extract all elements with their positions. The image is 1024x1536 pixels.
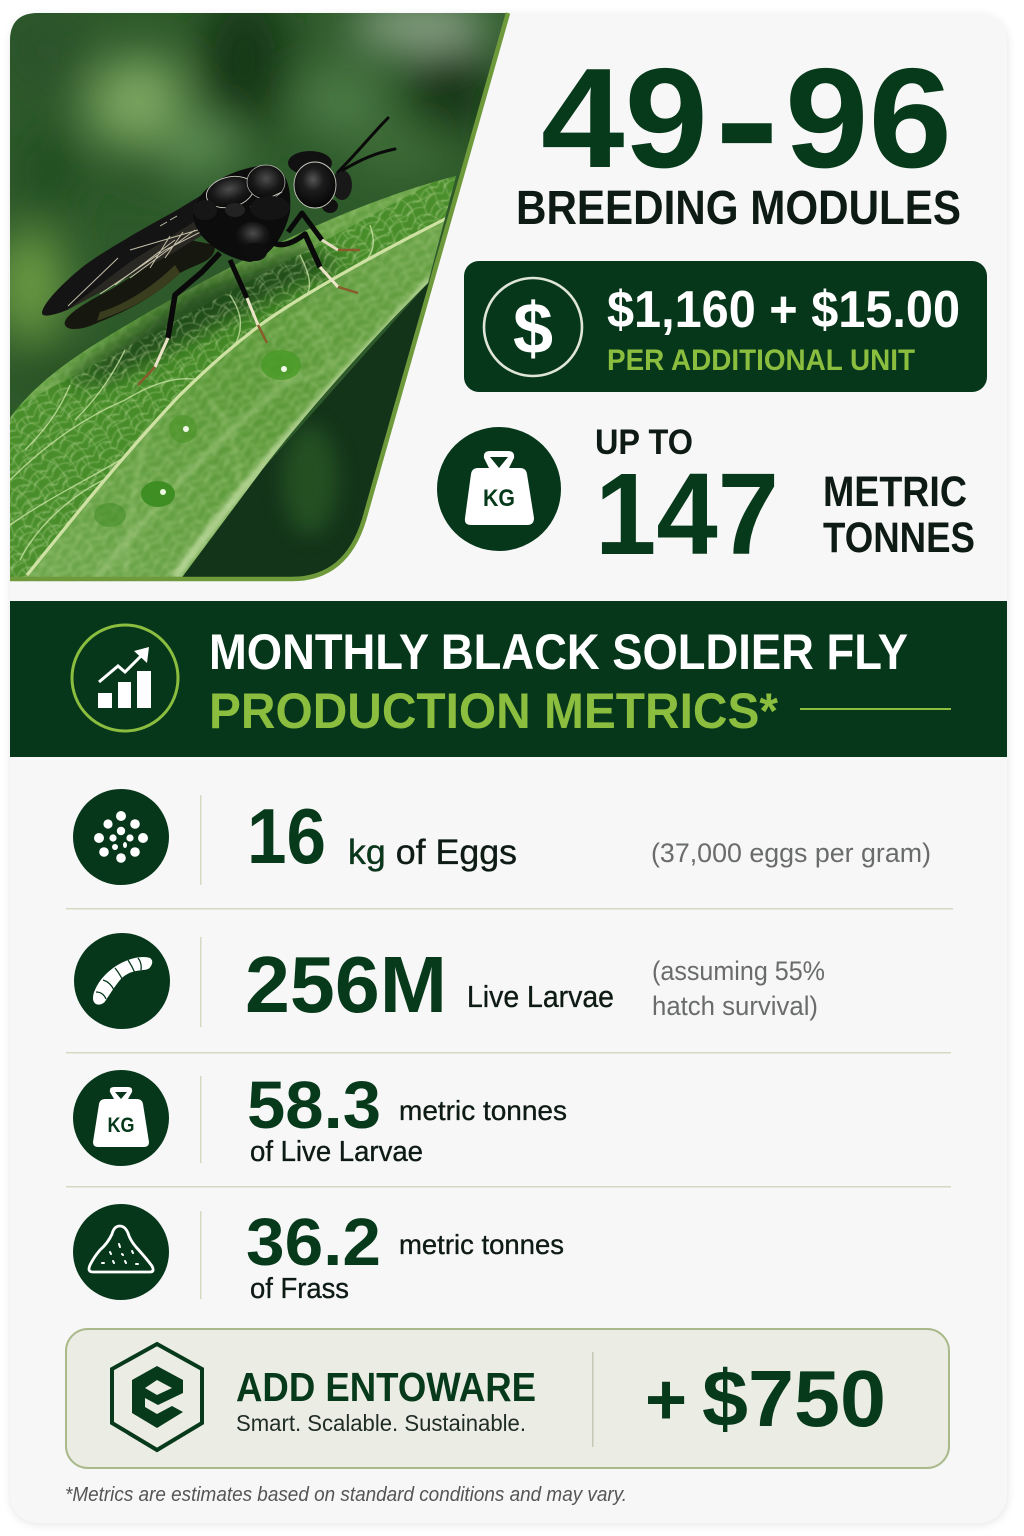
metric row: larvae count <box>74 933 825 1029</box>
product name: ADD ENTOWARE <box>236 1364 536 1410</box>
thorax <box>193 165 290 262</box>
abdomen <box>65 240 215 329</box>
fly <box>42 118 395 385</box>
icon: kg weight: KG <box>483 485 515 512</box>
note: (assuming 55% <box>652 956 825 986</box>
icon: dollar coin: $ <box>513 289 553 369</box>
label: kg of Eggs <box>348 833 517 872</box>
leaf <box>10 176 456 577</box>
fine veins left of midrib <box>10 178 456 577</box>
unit: metric tonnes <box>399 1095 567 1126</box>
metric tonnes label: TONNES <box>823 514 975 562</box>
heading: 49-96 breeding modules: BREEDING MODULES <box>516 182 961 235</box>
icon: kg weight <box>437 427 561 551</box>
value: 58.3 <box>247 1068 381 1143</box>
footnote: *Metrics are estimates based on standard conditions and may vary. <box>65 1484 627 1506</box>
midrib <box>27 218 447 575</box>
note: hatch survival) <box>652 991 818 1021</box>
icon: Entoware hexagon logo <box>112 1344 202 1450</box>
value: 16 <box>247 792 326 880</box>
tagline: Smart. Scalable. Sustainable. <box>236 1410 526 1436</box>
photo background bokeh <box>0 0 510 583</box>
metric tonnes label: METRIC <box>823 468 967 516</box>
label: of Live Larvae <box>250 1136 423 1168</box>
up to label: UP TO <box>595 423 693 462</box>
shields <box>206 176 252 208</box>
dark leaf tone left of midrib <box>10 170 456 580</box>
label: of Frass <box>250 1273 349 1305</box>
panel: price <box>464 261 987 392</box>
banner title: PRODUCTION METRICS* <box>209 683 779 739</box>
note: (37,000 eggs per gram) <box>651 838 931 868</box>
banner title <box>209 624 908 739</box>
value: 36.2 <box>246 1205 381 1280</box>
icon: dollar coin <box>484 278 582 376</box>
note <box>652 956 825 1021</box>
label: Live Larvae <box>467 979 614 1014</box>
add-on price: + <box>645 1360 687 1440</box>
icon: growth chart <box>72 625 178 731</box>
panel: photo of black soldier fly on leaf <box>0 0 510 590</box>
metric row: larvae weight <box>73 1068 567 1168</box>
icon: kg weight: KG <box>108 1114 134 1137</box>
icon: frass pile <box>73 1204 169 1300</box>
heading: 49-96 breeding modules: - <box>717 42 777 201</box>
banner title: MONTHLY BLACK SOLDIER FLY <box>209 624 908 680</box>
price text: $1,160 + $15.00 <box>607 281 960 339</box>
icon: kg weight <box>73 1070 169 1166</box>
heading: 49-96 breeding modules: 96 <box>785 39 952 198</box>
metric tonnes label <box>823 468 975 562</box>
price unit: PER ADDITIONAL UNIT <box>607 344 915 377</box>
metric row: eggs <box>73 789 931 885</box>
water droplets <box>94 350 301 527</box>
unit: metric tonnes <box>399 1229 564 1260</box>
blurred streaks right of midrib <box>95 280 432 580</box>
heading: 49-96 breeding modules: 49 <box>541 39 708 198</box>
near legs <box>272 234 320 267</box>
head <box>288 151 332 172</box>
far leg <box>288 213 322 240</box>
147 value: 147 <box>595 449 779 579</box>
heading: 49-96 breeding modules <box>516 39 961 235</box>
icon: eggs <box>73 789 169 885</box>
add-on price: $750 <box>702 1354 886 1443</box>
antennae <box>338 118 395 172</box>
panel: capacity <box>437 423 975 579</box>
soft texture on out-of-focus half <box>12 180 444 577</box>
metric row: frass <box>73 1204 564 1305</box>
icon: larva <box>74 933 170 1029</box>
shadow under fly <box>60 250 345 385</box>
wing <box>42 196 202 316</box>
panel: add Entoware <box>66 1329 949 1468</box>
section banner <box>10 601 1007 757</box>
value: 256M <box>245 940 447 1029</box>
